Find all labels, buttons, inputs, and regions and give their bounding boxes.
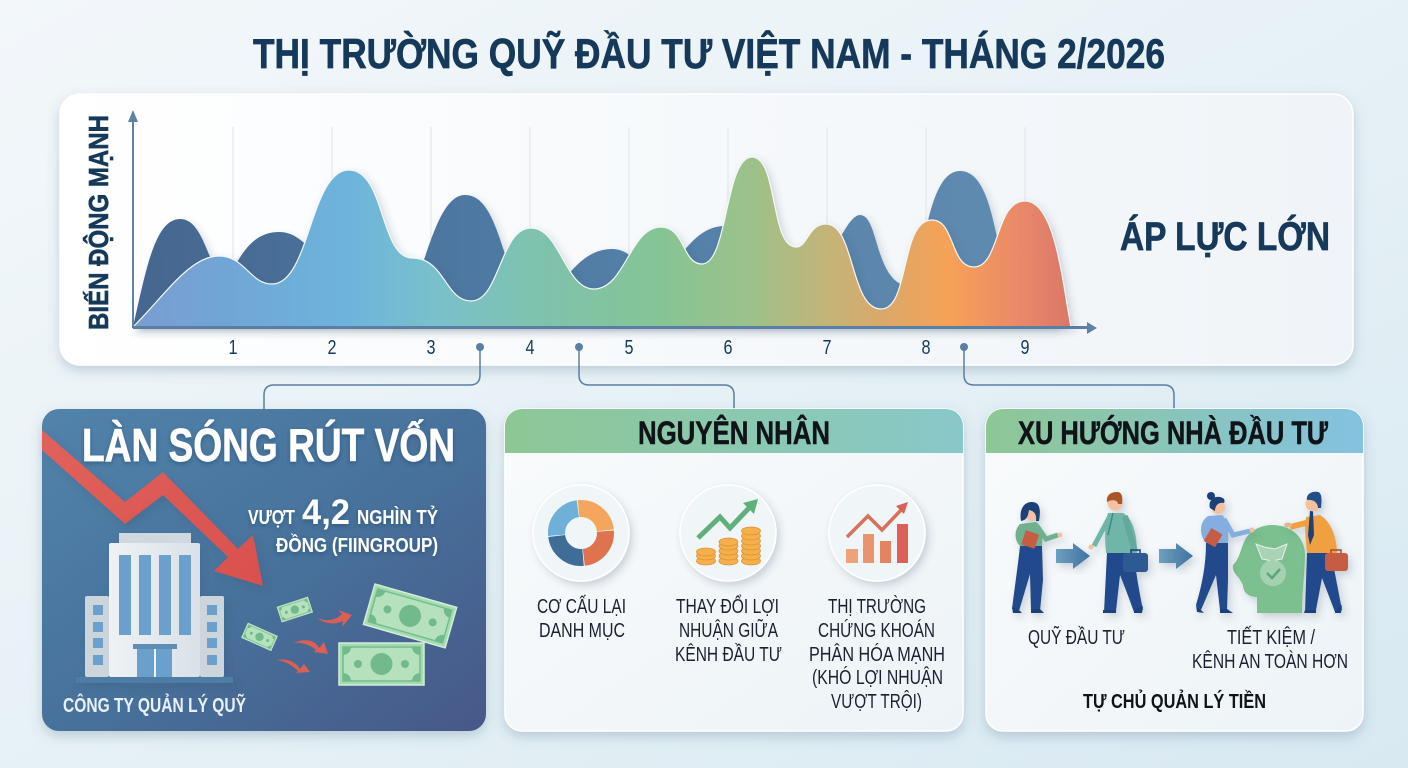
caption: changing returns: KÊNH ĐẦU TƯ [675,643,782,666]
icon: falling red arrow [42,430,263,586]
x-axis numbers: 8 [922,337,930,359]
icon: coins and rising arrow [680,485,776,581]
amount text [248,493,439,557]
amount text: ĐỒNG (FIINGROUP) [276,533,438,557]
x-axis numbers: 6 [724,337,732,359]
caption: changing returns [675,594,782,666]
icon: banknotes [242,584,457,685]
x-axis numbers: 3 [426,337,436,359]
amount text: NGHÌN TỶ [357,506,439,529]
icon: portfolio donut [533,485,629,581]
connector: chart to withdrawal panel [264,343,484,409]
connector: chart to causes panel [575,343,734,409]
arrow [1056,543,1090,569]
building label: CÔNG TY QUẢN LÝ QUỸ [63,693,247,717]
caption: stock market divergence: (KHÓ LỢI NHUẬN [812,666,943,689]
panel: capital withdrawal wave [42,409,486,731]
amount text: VƯỢT [248,507,295,529]
heading: NGUYÊN NHÂN [638,415,830,451]
caption: changing returns: THAY ĐỔI LỢI [676,594,779,618]
panel header [986,409,1363,453]
caption: stock market divergence: VƯỢT TRỘI) [831,690,922,713]
x-axis numbers: 1 [228,337,238,359]
icon: man with briefcase [1088,492,1148,613]
caption: stock market divergence: PHÂN HÓA MẠNH [809,643,945,666]
caption: stock market divergence: THỊ TRƯỜNG [828,595,926,618]
caption: stock market divergence: CHỨNG KHOÁN [818,619,935,642]
callout text: ÁP LỰC LỚN [1120,213,1330,259]
caption: stock market divergence [809,595,945,713]
panel: volatility chart [60,94,1353,365]
chart axes [128,110,1097,334]
conclusion text: TỰ CHỦ QUẢN LÝ TIỀN [1083,689,1266,713]
icon: fund company building [76,533,233,683]
area chart: back series [133,171,1060,327]
x-axis numbers [228,337,1030,359]
panel: causes [505,409,963,731]
caption: portfolio restructuring: CƠ CẤU LẠI [537,595,626,618]
area chart: front gradient series [133,157,1071,327]
x-axis numbers: 7 [822,337,832,359]
amount text: 4,2 [302,493,350,532]
caption: savings and safer channels [1192,626,1348,673]
x-axis numbers: 9 [1020,337,1030,359]
heading: LÀN SÓNG RÚT VỐN [82,419,455,471]
icon: small red flow arrows [276,610,352,673]
icon: bar chart with rising line [829,485,925,581]
caption: investment fund: QUỸ ĐẦU TƯ [1028,625,1125,649]
icon: green head with check [1233,525,1305,613]
x-axis numbers: 2 [328,337,336,359]
caption: savings and safer channels: KÊNH AN TOÀN HƠN [1192,650,1348,673]
caption: changing returns: NHUẬN GIỮA [679,618,779,642]
x-axis numbers: 4 [526,337,534,359]
icon: woman with book [1012,502,1062,613]
arrow [1159,543,1193,569]
panel: investor trend [986,409,1363,731]
caption: portfolio restructuring [537,595,626,642]
icon: man in orange with briefcase [1284,492,1348,613]
icon: woman with book, bun hair [1196,492,1254,613]
x-axis numbers: 5 [624,337,634,359]
y-axis label: BIẾN ĐỘNG MẠNH [82,115,114,330]
caption: savings and safer channels: TIẾT KIỆM / [1227,626,1315,649]
heading: XU HƯỚNG NHÀ ĐẦU TƯ [1018,415,1328,451]
connector: chart to investor trend panel [960,343,1174,409]
panel header [505,409,963,453]
caption: portfolio restructuring: DANH MỤC [539,620,625,642]
title: THỊ TRƯỜNG QUỸ ĐẦU TƯ VIỆT NAM - THÁNG 2/2026 [253,29,1165,77]
